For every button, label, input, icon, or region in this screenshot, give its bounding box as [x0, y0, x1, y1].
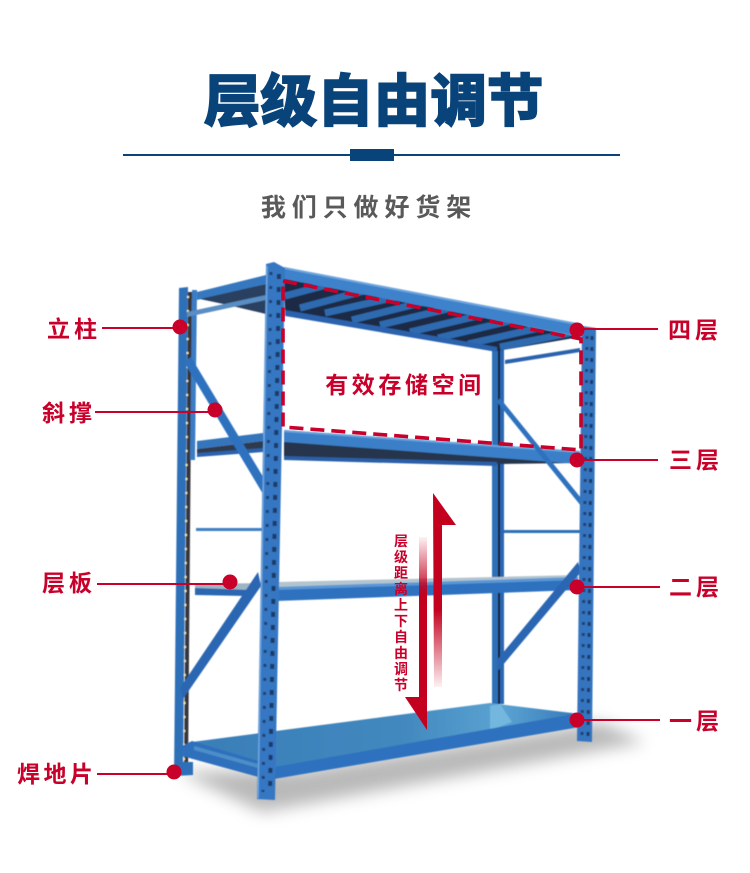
down arrow	[405, 537, 427, 730]
callout: level four	[570, 317, 722, 343]
vertical adjustment note: 节	[394, 677, 408, 693]
callout: level three	[570, 447, 723, 473]
title divider	[123, 149, 620, 161]
callout: level one	[570, 708, 723, 734]
vertical adjustment note: 距	[394, 565, 408, 581]
callout: upright	[47, 316, 188, 342]
effective storage space label: 有效存储空间	[325, 372, 485, 398]
left braces	[180, 357, 265, 699]
front left upright	[257, 262, 285, 800]
back right upright	[492, 345, 504, 704]
shelving rack	[174, 262, 645, 812]
second-level shelf	[197, 430, 580, 466]
adjustment arrows	[405, 493, 456, 730]
vertical adjustment note: 级	[394, 549, 408, 565]
back left upright	[174, 287, 197, 776]
callout: welded foot plate	[17, 761, 182, 787]
effective storage space dashed frame	[283, 281, 581, 450]
top shelf	[187, 267, 582, 364]
vertical adjustment note: 层	[394, 533, 408, 549]
bottom shelf	[182, 703, 580, 779]
callout: shelf board: 层板	[42, 570, 96, 596]
callout: shelf board	[42, 570, 238, 596]
third-level shelf	[195, 575, 578, 601]
callout: level two: 二层	[669, 574, 723, 600]
callout: diagonal brace	[42, 400, 222, 426]
vertical adjustment note: 离	[394, 581, 408, 597]
vertical adjustment note: 自	[394, 629, 408, 645]
callout: diagonal brace: 斜撑	[42, 400, 96, 426]
title: 层级自由调节	[204, 70, 544, 133]
floor shadow	[178, 722, 645, 812]
vertical adjustment note: 下	[394, 613, 408, 629]
callout: level two	[570, 574, 723, 600]
front right upright	[577, 326, 596, 742]
vertical adjustment note: 由	[394, 645, 408, 661]
right braces	[497, 398, 581, 672]
subtitle: 我们只做好货架	[261, 194, 477, 222]
callout: level four: 四层	[668, 317, 722, 343]
callout: level one: 一层	[669, 708, 723, 734]
up arrow	[433, 493, 456, 687]
callout: welded foot plate: 焊地片	[17, 761, 96, 787]
vertical adjustment note: 调	[394, 661, 408, 677]
callout: level three: 三层	[669, 447, 723, 473]
callout: upright: 立柱	[47, 316, 101, 342]
vertical adjustment note: 上	[394, 597, 408, 613]
